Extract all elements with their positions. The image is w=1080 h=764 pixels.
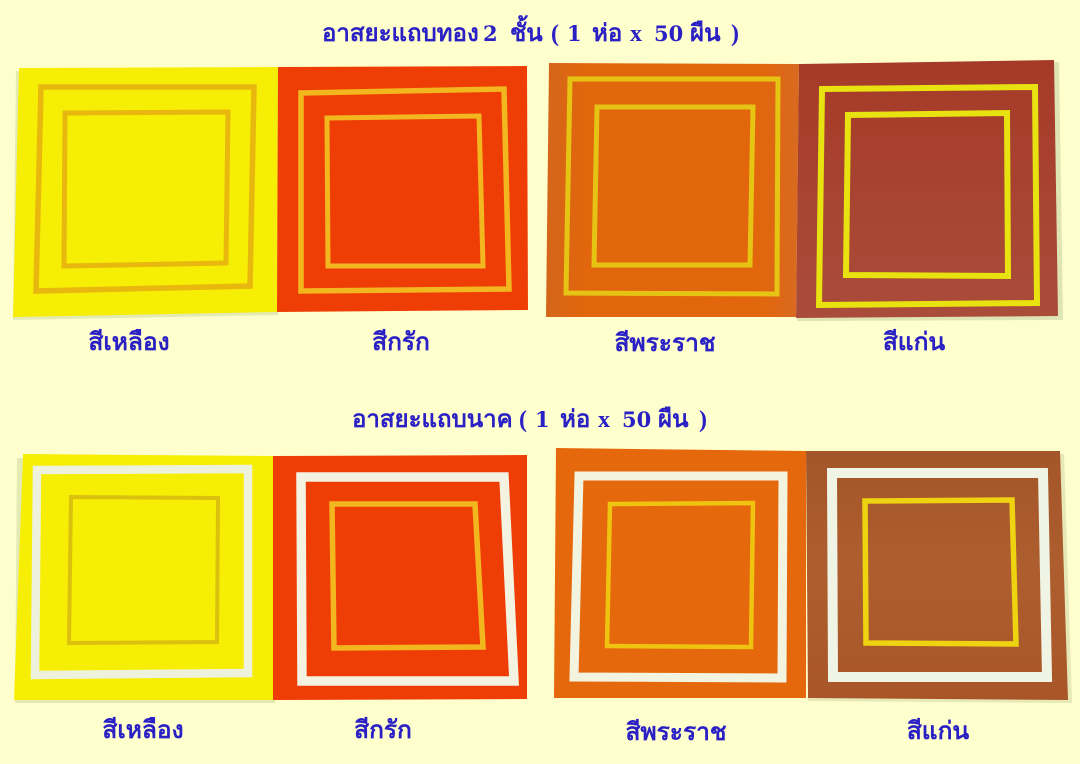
title: gold band two-layer set: ชั้น: [510, 14, 543, 47]
title: gold band two-layer set: อาสยะแถบทอง: [322, 21, 479, 47]
label: red-orange: สีกรัก: [372, 328, 430, 356]
title: gold band two-layer set: x: [630, 21, 642, 47]
title: naga band set: อาสยะแถบนาค: [352, 407, 513, 433]
title: naga band set: ผืน: [658, 406, 689, 433]
title: naga band set: 50: [622, 407, 651, 432]
panel: gold band yellow cloth: [13, 67, 278, 320]
title: gold band two-layer set: 1: [567, 21, 582, 46]
title: gold band two-layer set: 2: [483, 21, 498, 46]
title: naga band set: ): [699, 407, 707, 433]
panel: naga band saffron cloth: [554, 448, 806, 698]
title: naga band set: (: [519, 407, 527, 433]
title: naga band set: 1: [535, 407, 550, 432]
label: yellow: สีเหลือง: [102, 716, 184, 744]
title: gold band two-layer set: (: [551, 21, 559, 47]
label: saffron: สีพระราช: [614, 329, 716, 357]
title: naga band set: x: [598, 407, 610, 433]
panel: gold band saffron cloth: [546, 63, 799, 317]
label: maroon: สีแก่น: [883, 328, 945, 356]
panel: naga band yellow cloth: [14, 454, 275, 703]
panel: naga band red-orange cloth: [273, 455, 527, 700]
panel: gold band maroon cloth: [796, 60, 1063, 321]
title: gold band two-layer set: 50: [654, 21, 683, 46]
panel: gold band red-orange cloth: [277, 66, 528, 312]
label: yellow: สีเหลือง: [88, 328, 170, 356]
label: maroon: สีแก่น: [907, 717, 969, 745]
label: red-orange: สีกรัก: [354, 716, 412, 744]
title: gold band two-layer set: ห่อ: [592, 21, 622, 47]
label: saffron: สีพระราช: [625, 718, 727, 746]
panel: naga band brown cloth: [806, 451, 1072, 703]
title: naga band set: ห่อ: [560, 407, 590, 433]
title: gold band two-layer set: ผืน: [690, 20, 721, 47]
title: gold band two-layer set: ): [731, 21, 739, 47]
